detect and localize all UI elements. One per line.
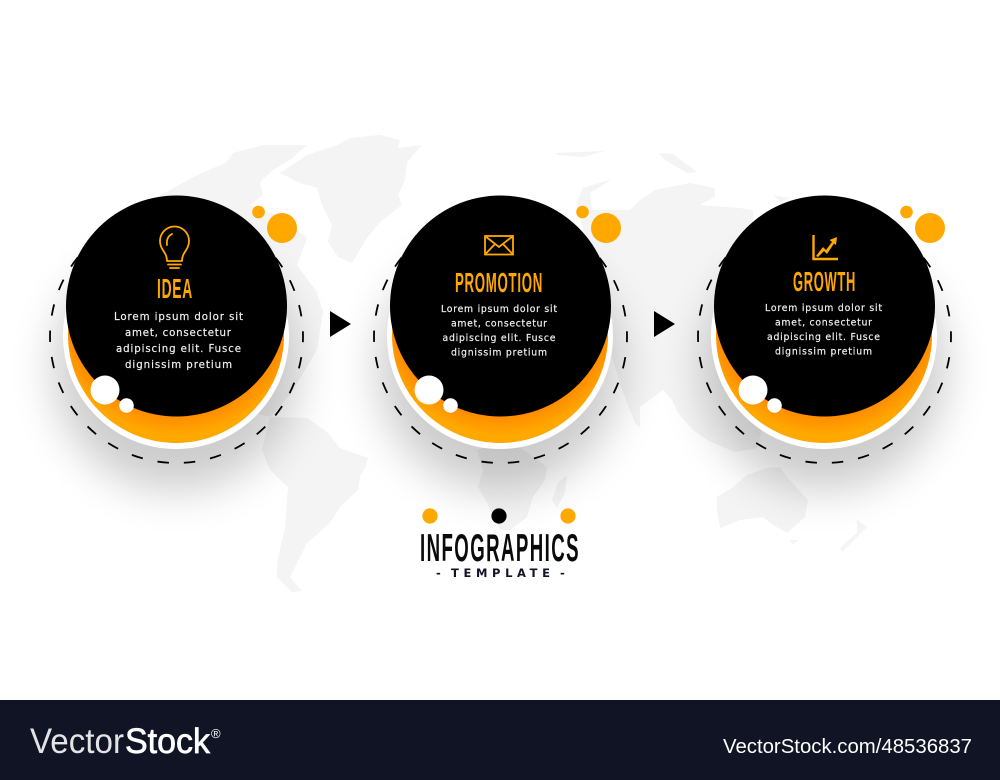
subheading: template: -	[560, 566, 565, 580]
body text: amet, consectetur	[125, 328, 232, 339]
step 3 card: growth: GROWTH	[793, 266, 856, 297]
icon: growth chart	[814, 235, 838, 259]
soft shadow	[54, 246, 298, 490]
white bubbles	[414, 376, 458, 413]
white bubbles	[90, 376, 134, 413]
body text: amet, consectetur	[451, 318, 547, 330]
infographic canvas: INFOGRAPHICS	[420, 527, 580, 570]
black circle	[66, 196, 287, 416]
orange crescent	[392, 227, 608, 443]
soft shadow	[702, 246, 946, 490]
body text: adipiscing elit. Fusce	[767, 332, 880, 343]
icon: envelope	[485, 236, 513, 254]
step 1 card: idea: IDEA	[157, 273, 193, 304]
body text: Lorem ipsum dolor sit	[765, 303, 882, 314]
logo dots	[422, 508, 576, 524]
body text: dignissim pretium	[775, 346, 872, 358]
body text	[114, 312, 243, 371]
body text: Lorem ipsum dolor sit	[441, 304, 557, 315]
body text	[765, 303, 882, 358]
footer logo: Stock	[125, 722, 210, 761]
body text: amet, consectetur	[775, 318, 872, 328]
step 3 card: growth	[698, 196, 951, 490]
footer logo: Vector	[30, 722, 124, 761]
white base circle	[711, 223, 937, 449]
white bubbles	[738, 376, 782, 413]
body text: dignissim pretium	[451, 348, 547, 358]
orange crescent	[68, 227, 284, 443]
footer logo	[30, 722, 210, 761]
soft shadow	[378, 246, 622, 490]
body text: Lorem ipsum dolor sit	[114, 312, 243, 323]
step 1 card: idea	[50, 196, 303, 490]
footer bar	[0, 700, 1000, 780]
orange bubbles	[576, 206, 621, 243]
world map background	[110, 135, 867, 592]
body text: dignissim pretium	[125, 360, 232, 371]
orange crescent	[716, 227, 932, 443]
arrow 1	[330, 311, 351, 337]
body text: adipiscing elit. Fusce	[116, 344, 241, 355]
step 2 card: promotion	[374, 196, 627, 490]
black circle	[714, 196, 935, 416]
dashed ring	[374, 210, 627, 463]
white base circle	[63, 223, 289, 449]
registered mark: ®	[211, 726, 221, 741]
arrow 2	[654, 311, 675, 337]
orange bubbles	[252, 206, 297, 243]
footer id: VectorStock.com/48536837	[723, 736, 972, 758]
body text	[441, 304, 557, 358]
dashed ring	[698, 210, 951, 463]
white base circle	[387, 223, 613, 449]
icon: light bulb	[160, 226, 189, 268]
step 2 card: promotion: PROMOTION	[455, 267, 543, 298]
orange bubbles	[900, 206, 945, 243]
dashed ring	[50, 210, 303, 463]
black circle	[390, 196, 611, 416]
subheading: template: -	[436, 566, 441, 580]
body text: adipiscing elit. Fusce	[442, 333, 556, 344]
subheading: template: TEMPLATE	[451, 566, 550, 580]
